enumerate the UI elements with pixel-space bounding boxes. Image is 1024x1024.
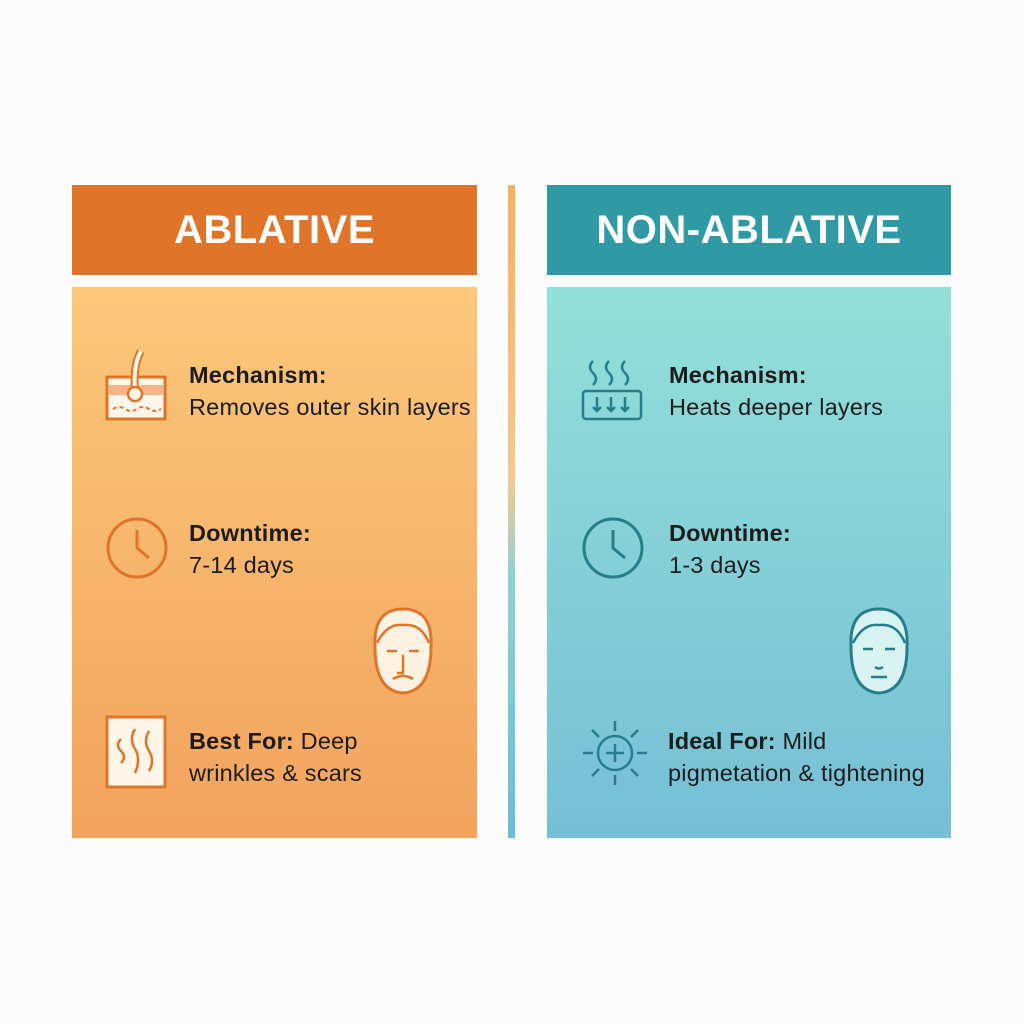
text: mechanism: Mechanism:	[189, 362, 327, 388]
header: ablative	[72, 185, 477, 275]
text: mechanism: Mechanism:	[669, 362, 807, 388]
icon: sun plus	[583, 721, 647, 785]
icon: old face	[373, 608, 433, 694]
text: mechanism	[669, 362, 883, 420]
text: best for	[189, 728, 362, 786]
text: downtime	[669, 520, 791, 578]
text: downtime: Downtime:	[669, 520, 791, 546]
panel: non-ablative	[547, 287, 951, 838]
icon: wrinkles	[106, 716, 166, 788]
text: mechanism	[189, 362, 471, 420]
text: downtime	[189, 520, 311, 578]
icon: young face	[849, 608, 909, 694]
panel: ablative	[72, 287, 477, 838]
text: best for: Best For: Deep	[189, 728, 358, 754]
header: non-ablative	[547, 185, 951, 275]
text: ideal for	[668, 728, 925, 786]
text: downtime: 7-14 days	[189, 552, 294, 578]
text: ideal for: Ideal For: Mild	[668, 728, 826, 754]
text: ideal for: pigmetation & tightening	[668, 760, 925, 786]
text: downtime: Downtime:	[189, 520, 311, 546]
text: best for: wrinkles & scars	[189, 760, 362, 786]
text: downtime: 1-3 days	[669, 552, 761, 578]
icon: skin layers	[106, 349, 166, 420]
header: non-ablative: NON-ABLATIVE	[596, 208, 902, 252]
icon: clock	[582, 518, 644, 578]
icon: clock	[106, 518, 168, 578]
text: mechanism: Heats deeper layers	[669, 394, 883, 420]
divider	[508, 185, 515, 838]
header: ablative: ABLATIVE	[174, 208, 375, 252]
text: mechanism: Removes outer skin layers	[189, 394, 471, 420]
icon: heat	[582, 360, 642, 420]
